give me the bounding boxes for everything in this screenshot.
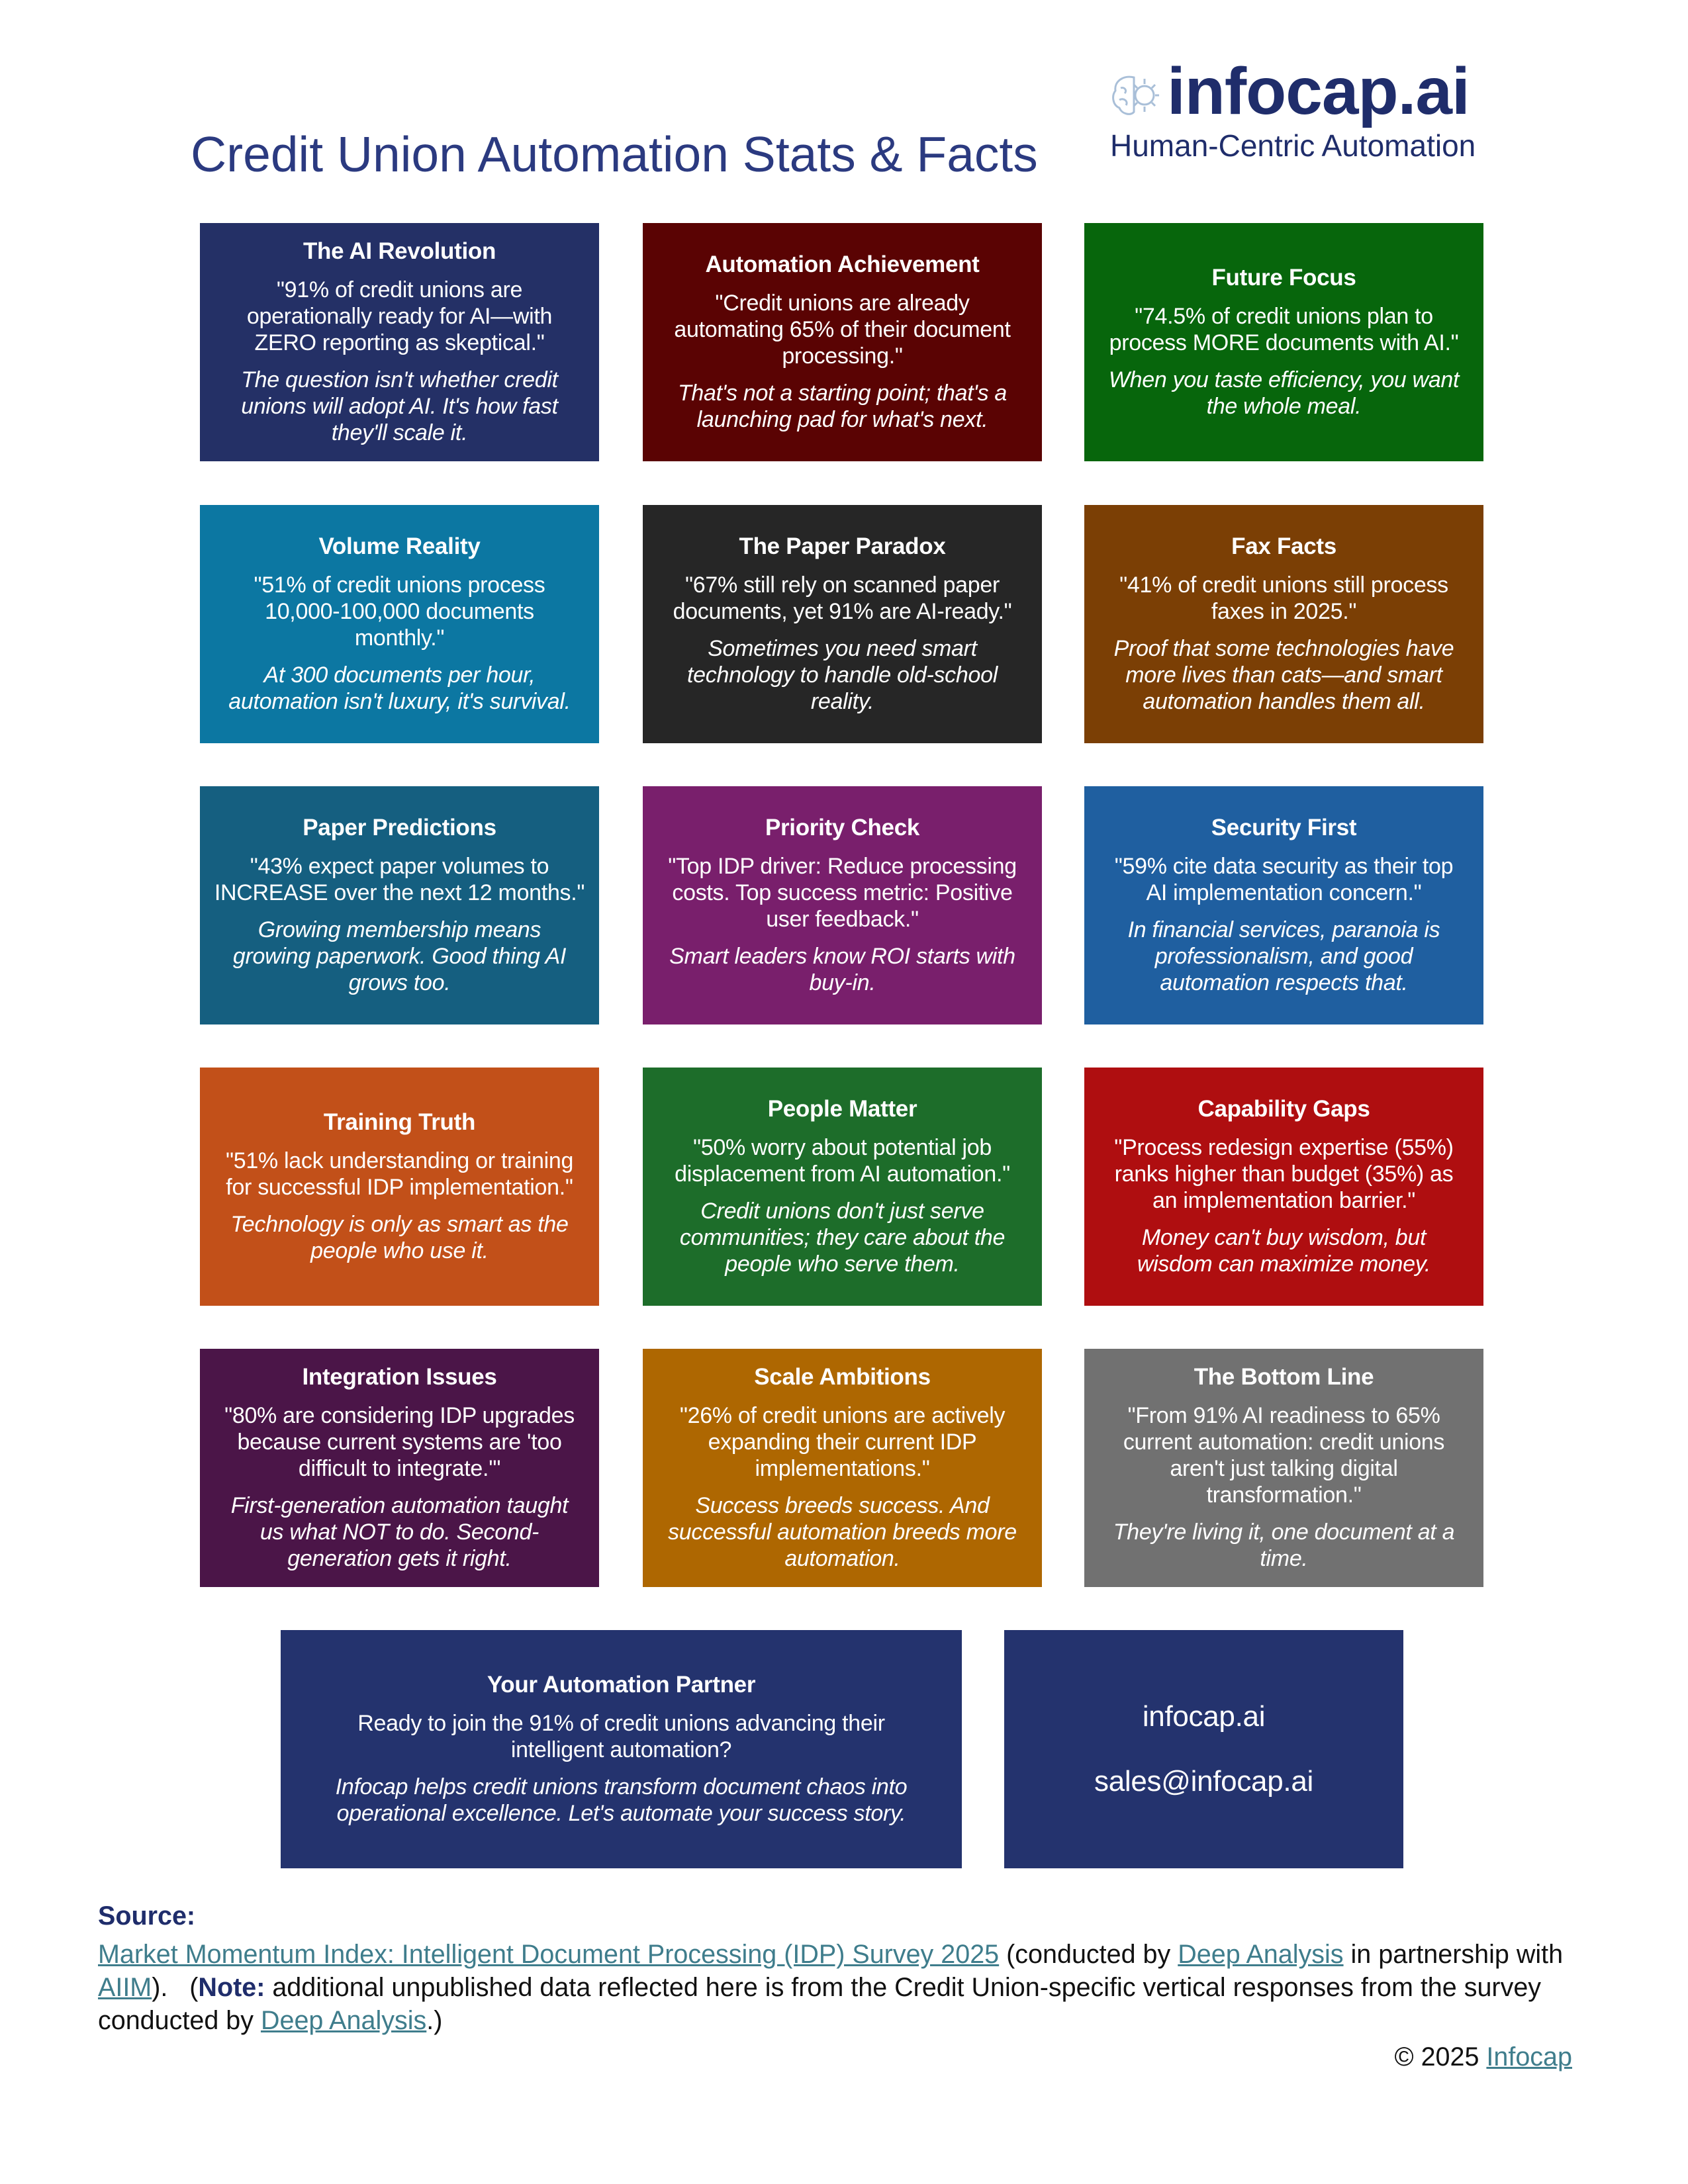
panel: Future Focus: process MORE documents with AI.": [1109, 330, 1458, 355]
panel: Volume Reality: automation isn't luxury, it's survival.: [228, 689, 571, 714]
panel: The AI Revolution: [200, 223, 599, 461]
panel: The Bottom Line: "From 91% AI readiness to 65%: [1127, 1403, 1440, 1428]
panel: Training Truth: Training Truth: [324, 1109, 475, 1135]
panel: contact: sales@infocap.ai: [1094, 1765, 1313, 1797]
panel: Paper Predictions: Paper Predictions: [303, 815, 496, 841]
panel: The Bottom Line: [1084, 1349, 1483, 1587]
panel: The Bottom Line: transformation.": [1206, 1482, 1361, 1508]
panel: Your Automation Partner: operational excellence. Let's automate your success story.: [337, 1801, 906, 1826]
panel: The AI Revolution: they'll scale it.: [332, 420, 467, 445]
title: Credit Union Automation Stats & Facts: [191, 126, 1038, 182]
panel: Fax Facts: faxes in 2025.": [1211, 599, 1356, 624]
panel: The AI Revolution: operationally ready for AI—with: [247, 304, 552, 329]
panel: The Bottom Line: current automation: credit unions: [1123, 1430, 1444, 1455]
panel: The Paper Paradox: documents, yet 91% are AI-ready.": [673, 599, 1011, 624]
panel: Future Focus: [1084, 223, 1483, 461]
panel: The Bottom Line: The Bottom Line: [1194, 1364, 1374, 1390]
panel: Training Truth: [200, 1068, 599, 1306]
panel: Priority Check: buy-in.: [810, 970, 875, 995]
panel: Priority Check: Priority Check: [765, 815, 919, 841]
panel: The AI Revolution: unions will adopt AI. It's how fast: [241, 394, 558, 419]
panel: Training Truth: for successful IDP implementation.": [226, 1175, 573, 1200]
panel: The Paper Paradox: The Paper Paradox: [739, 533, 945, 559]
panel: Security First: Security First: [1211, 815, 1356, 841]
panel: Scale Ambitions: implementations.": [755, 1456, 929, 1481]
panel: Capability Gaps: Capability Gaps: [1197, 1096, 1370, 1122]
panel: Capability Gaps: [1084, 1068, 1483, 1306]
panel: Security First: "59% cite data security as their top: [1115, 854, 1453, 879]
panel: contact: [1004, 1630, 1403, 1868]
panel: The Bottom Line: They're living it, one document at a: [1113, 1520, 1454, 1545]
panel: Fax Facts: automation handles them all.: [1143, 689, 1425, 714]
panel: Training Truth: people who use it.: [310, 1238, 489, 1263]
panel: Paper Predictions: INCREASE over the next 12 months.": [214, 880, 585, 905]
panel: Scale Ambitions: [643, 1349, 1042, 1587]
panel: Volume Reality: Volume Reality: [318, 533, 481, 559]
panel: Your Automation Partner: Infocap helps credit unions transform document chaos into: [336, 1774, 907, 1799]
panel: Scale Ambitions: Success breeds success. And: [695, 1493, 990, 1518]
panel: Capability Gaps: wisdom can maximize money.: [1137, 1251, 1430, 1277]
logo: [1110, 54, 1476, 163]
panel: Volume Reality: 10,000-100,000 documents: [265, 599, 534, 624]
panel: The Paper Paradox: [643, 505, 1042, 743]
panel: Integration Issues: difficult to integrate.'": [299, 1456, 500, 1481]
panel: The AI Revolution: The AI Revolution: [303, 238, 496, 264]
panel: Fax Facts: "41% of credit unions still process: [1119, 572, 1448, 598]
panel: People Matter: Credit unions don't just serve: [700, 1199, 984, 1224]
copyright: © 2025 Infocap: [1394, 2042, 1572, 2071]
panel: Priority Check: Smart leaders know ROI starts with: [669, 944, 1015, 969]
panel: Paper Predictions: Growing membership means: [258, 917, 541, 942]
panel: Training Truth: "51% lack understanding or training: [226, 1148, 573, 1173]
panel: Future Focus: "74.5% of credit unions plan to: [1135, 304, 1433, 329]
panel: Capability Gaps: "Process redesign expertise (55%): [1114, 1135, 1454, 1160]
panel: Integration Issues: [200, 1349, 599, 1587]
panel: Paper Predictions: [200, 786, 599, 1024]
panel: Scale Ambitions: successful automation breeds more: [668, 1520, 1017, 1545]
panel: Automation Achievement: That's not a starting point; that's a: [678, 381, 1007, 406]
panel: Fax Facts: [1084, 505, 1483, 743]
panel: Integration Issues: generation gets it right.: [287, 1546, 512, 1571]
panel: Volume Reality: monthly.": [355, 625, 444, 651]
panel: Paper Predictions: grows too.: [349, 970, 450, 995]
panel: Capability Gaps: Money can't buy wisdom, but: [1142, 1225, 1426, 1250]
panel: Automation Achievement: [643, 223, 1042, 461]
panel: Security First: AI implementation concern.": [1147, 880, 1421, 905]
panel: Priority Check: [643, 786, 1042, 1024]
panel: The AI Revolution: ZERO reporting as skeptical.": [254, 330, 544, 355]
panel: Priority Check: user feedback.": [766, 907, 919, 932]
panel: Future Focus: Future Focus: [1211, 265, 1356, 291]
panel: Capability Gaps: ranks higher than budget (35%) as: [1115, 1161, 1453, 1187]
panel: Volume Reality: [200, 505, 599, 743]
panel: Your Automation Partner: intelligent automation?: [511, 1737, 731, 1762]
panel: Integration Issues: us what NOT to do. Second-: [260, 1520, 539, 1545]
panel: Your Automation Partner: Ready to join the 91% of credit unions advancing their: [357, 1711, 885, 1736]
panel: Security First: professionalism, and good: [1155, 944, 1413, 969]
panel: The Paper Paradox: reality.: [811, 689, 874, 714]
panel: Scale Ambitions: automation.: [784, 1546, 900, 1571]
panel: Integration Issues: because current systems are 'too: [237, 1430, 562, 1455]
source block: Market Momentum Index: Intelligent Document Processing (IDP) Survey 2025 (conducted by Deep Analysis in partnership with: [98, 1940, 1563, 1969]
panel: Paper Predictions: "43% expect paper volumes to: [250, 854, 549, 879]
panel: People Matter: communities; they care about the: [680, 1225, 1005, 1250]
tagline: Human-Centric Automation: [1110, 128, 1476, 163]
panel: Security First: In financial services, paranoia is: [1128, 917, 1440, 942]
panel: People Matter: [643, 1068, 1042, 1306]
panel: The AI Revolution: The question isn't whether credit: [241, 367, 558, 392]
panel: Security First: automation respects that.: [1160, 970, 1408, 995]
panel: Fax Facts: Fax Facts: [1231, 533, 1336, 559]
panel: Capability Gaps: an implementation barrier.": [1152, 1188, 1415, 1213]
panel: Automation Achievement: launching pad for what's next.: [697, 407, 988, 432]
panel: The Paper Paradox: Sometimes you need smart: [708, 636, 977, 661]
panel: Priority Check: costs. Top success metric: Positive: [672, 880, 1013, 905]
panel: The Bottom Line: aren't just talking digital: [1170, 1456, 1398, 1481]
panel: People Matter: displacement from AI automation.": [675, 1161, 1010, 1187]
brand name: infocap.ai: [1167, 54, 1470, 128]
panel: Priority Check: "Top IDP driver: Reduce processing: [668, 854, 1017, 879]
panel: People Matter: "50% worry about potential job: [693, 1135, 992, 1160]
panel: Volume Reality: At 300 documents per hour,: [264, 662, 535, 688]
source block: AIIM). (Note: additional unpublished data reflected here is from the Credit Union-specific vertical responses from the survey: [98, 1973, 1541, 2002]
source block: conducted by Deep Analysis.): [98, 2006, 442, 2035]
panel: Scale Ambitions: "26% of credit unions are actively: [680, 1403, 1005, 1428]
source block: Source:: [98, 1901, 195, 1931]
panel: The Bottom Line: time.: [1260, 1546, 1308, 1571]
panel: Future Focus: When you taste efficiency, you want: [1109, 367, 1459, 392]
panel: The Paper Paradox: technology to handle old-school: [687, 662, 998, 688]
panel: Scale Ambitions: expanding their current IDP: [708, 1430, 976, 1455]
panel: Your Automation Partner: [281, 1630, 962, 1868]
panel: Future Focus: the whole meal.: [1207, 394, 1361, 419]
panel: Volume Reality: "51% of credit unions process: [254, 572, 545, 598]
panel: Automation Achievement: Automation Achievement: [705, 251, 980, 277]
panel: Fax Facts: more lives than cats—and smart: [1125, 662, 1442, 688]
panel: Automation Achievement: processing.": [782, 343, 903, 369]
icon: brain gear: [1112, 75, 1159, 115]
panel: People Matter: people who serve them.: [725, 1251, 960, 1277]
panel: The AI Revolution: "91% of credit unions are: [277, 277, 522, 302]
panel: Security First: [1084, 786, 1483, 1024]
panel: Integration Issues: First-generation automation taught: [231, 1493, 568, 1518]
panel: Paper Predictions: growing paperwork. Good thing AI: [233, 944, 566, 969]
panel: Automation Achievement: "Credit unions are already: [715, 291, 970, 316]
panel: Automation Achievement: automating 65% of their document: [674, 317, 1011, 342]
panel: Integration Issues: Integration Issues: [302, 1364, 497, 1390]
panel: Integration Issues: "80% are considering IDP upgrades: [224, 1403, 575, 1428]
panel: contact: infocap.ai: [1143, 1700, 1265, 1733]
panel: Training Truth: Technology is only as smart as the: [230, 1212, 569, 1237]
panel: The Paper Paradox: "67% still rely on scanned paper: [685, 572, 1000, 598]
source block: [98, 1901, 1563, 2035]
panel: Your Automation Partner: Your Automation Partner: [487, 1672, 755, 1698]
panel: Scale Ambitions: Scale Ambitions: [754, 1364, 931, 1390]
panel: Fax Facts: Proof that some technologies have: [1114, 636, 1454, 661]
panel: People Matter: People Matter: [768, 1096, 917, 1122]
